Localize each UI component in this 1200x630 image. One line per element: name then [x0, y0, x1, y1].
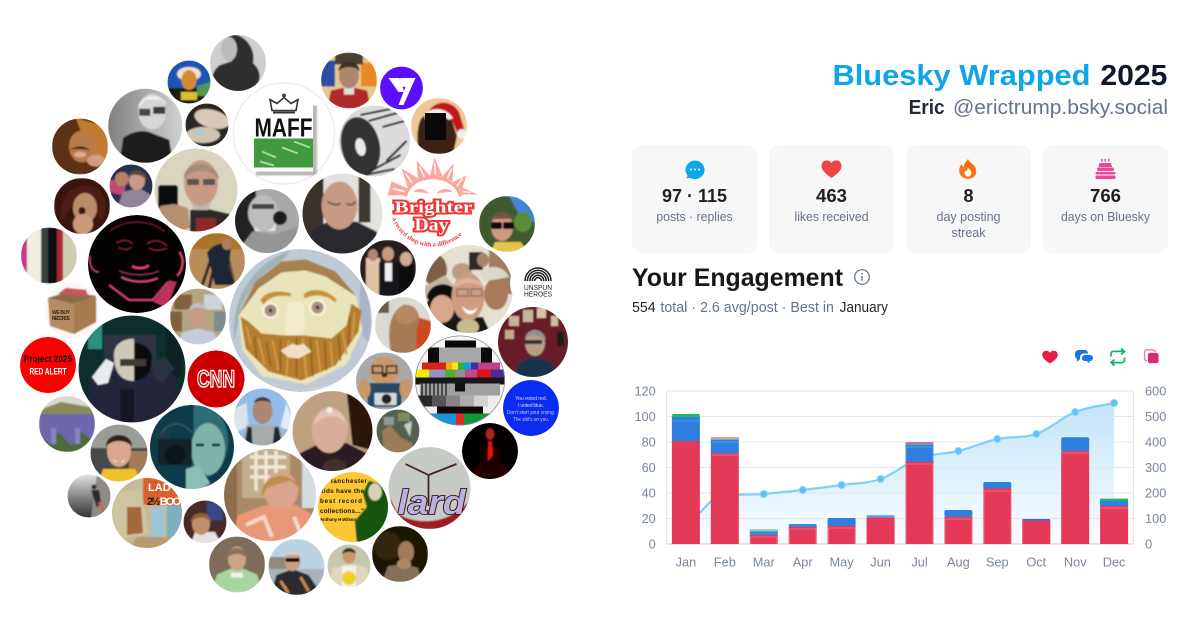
left axis labels: 40	[642, 486, 656, 500]
bar highlights	[712, 453, 1128, 544]
engagement summary: 554	[632, 300, 656, 316]
avatar: MAFF logo	[232, 82, 336, 185]
month labels: Aug	[947, 554, 970, 570]
avatar: Brighter Day record shop logo	[388, 158, 478, 246]
avatar: deer and bird	[376, 409, 420, 453]
avatar: MAFF logo: MAFF	[254, 112, 312, 142]
right axis labels	[1145, 384, 1166, 552]
bar: Sep	[983, 482, 1011, 544]
avatar: record shop crate: WE BUY	[52, 310, 71, 316]
avatar: CNN logo	[188, 350, 244, 408]
avatar: Ladybird books	[109, 477, 183, 549]
avatar: man taking a selfie	[154, 148, 238, 232]
bar: Jun	[867, 515, 895, 544]
icon: info	[855, 270, 869, 284]
right axis labels: 100	[1145, 511, 1166, 526]
avatar: Brighter Day record shop logo: Brighter	[394, 198, 473, 216]
left axis labels	[634, 384, 656, 552]
avatar: man in a pub	[497, 306, 569, 378]
avatar: Daft Punk album cover	[78, 315, 186, 423]
right axis labels: 200	[1145, 486, 1166, 500]
icon: birthday cake	[1096, 159, 1116, 179]
avatar: man with moustache	[52, 118, 108, 174]
stat card: day posting streak: 8	[964, 185, 974, 206]
avatar: Lard album cover: lard	[398, 484, 467, 522]
avatar: two women hugging	[109, 164, 153, 208]
stat card: day posting streak: day posting	[936, 209, 1000, 224]
engagement summary	[632, 300, 889, 316]
avatar: curly dog	[375, 297, 431, 353]
stat card: likes received: likes received	[794, 209, 868, 224]
avatar: teddy bear with camera	[356, 352, 414, 410]
bar: Mar	[750, 529, 778, 544]
avatar: Project 2025 red alert: Project 2025	[24, 353, 72, 364]
avatar: man with smiley shirt	[327, 544, 371, 588]
bar: Jan	[672, 414, 700, 544]
avatar: blue circle with poem text: The shit's on you.	[513, 417, 549, 423]
avatar: bearded man monochrome	[234, 188, 300, 254]
month labels: May	[830, 554, 854, 570]
avatar: Manchester record collections quote: Anthony H Wilson	[320, 517, 356, 522]
user name and handle: @erictrump.bsky.social	[953, 97, 1168, 119]
month labels: Apr	[793, 554, 813, 570]
chart grid	[666, 391, 1134, 544]
cumulative line	[686, 403, 1114, 518]
avatar: lupine field	[39, 396, 95, 452]
avatar: blue circle with poem text: I voted blue.	[518, 403, 544, 409]
stat card: day posting streak	[906, 145, 1031, 253]
avatar: Manchester record collections quote	[318, 472, 389, 542]
bar: Oct	[1022, 519, 1050, 544]
avatar: Lard album cover	[388, 447, 470, 529]
icon: legend reposts	[1111, 348, 1124, 366]
stacked bars	[672, 414, 1128, 544]
right axis labels: 500	[1145, 409, 1166, 424]
avatar: man in grey hoodie	[234, 388, 292, 446]
month labels: Jul	[911, 554, 928, 570]
stat card: likes received: 463	[816, 185, 847, 206]
left axis labels: 120	[634, 384, 656, 398]
avatar: grey man with glasses	[107, 88, 183, 164]
stat card: days on Bluesky	[1043, 145, 1168, 253]
avatar: teal portrait with camera	[149, 404, 235, 491]
avatar: young man in yellow shirt	[90, 424, 148, 482]
avatar: group selfie	[423, 244, 514, 335]
avatar: woman in dark with hand on mouth	[372, 526, 428, 582]
bar: Feb	[711, 437, 739, 544]
avatar: curly hair dark portrait	[54, 178, 110, 234]
right axis labels: 300	[1145, 460, 1166, 475]
avatar: cartoon Einstein	[167, 60, 211, 104]
avatar: bald man in black tee	[302, 172, 384, 254]
avatar: Manchester record collections quote: collections..."	[320, 508, 364, 515]
avatar: blue circle with poem text: Don't start your crying.	[507, 410, 555, 416]
avatar: purple V logo	[380, 66, 423, 110]
avatar: blue circle with poem text: You voted red.	[515, 396, 547, 402]
left axis labels: 20	[642, 511, 656, 526]
month labels: Sep	[986, 554, 1009, 570]
avatar: blue circle with poem text	[503, 380, 559, 436]
avatar: bald man smiling	[292, 390, 374, 475]
avatar: Brighter Day record shop logo: Day	[414, 214, 448, 234]
avatar: cyclist on road	[67, 474, 111, 518]
month labels: Jun	[870, 554, 891, 570]
icon: legend replies	[1075, 350, 1093, 364]
title: Bluesky Wrapped	[832, 60, 1090, 92]
avatar: Manchester record collections quote: ianchester	[331, 478, 368, 485]
bar: Aug	[944, 510, 972, 544]
left axis labels: 0	[649, 536, 656, 552]
bar: Apr	[789, 524, 817, 544]
avatar: worn shoes	[186, 104, 228, 146]
bar: Nov	[1061, 437, 1089, 544]
engagement summary: total · 2.6 avg/post · Best in	[660, 300, 834, 316]
avatar: TV test card	[415, 336, 505, 426]
avatar: santa hat with black square	[411, 98, 467, 154]
stat card: day posting streak: streak	[952, 225, 986, 240]
right axis labels: 600	[1145, 384, 1166, 398]
stat card: days on Bluesky: 766	[1090, 185, 1121, 206]
avatar: three people in formal dress	[360, 240, 416, 296]
avatar: woman with short hair	[183, 500, 227, 544]
bar: Jul	[906, 442, 934, 544]
bar: Dec	[1100, 498, 1128, 544]
stat card: posts and replies: posts · replies	[656, 209, 733, 224]
month labels	[676, 554, 1126, 570]
right axis labels: 400	[1145, 434, 1166, 450]
avatar: CNN logo: CNN	[197, 366, 235, 393]
month labels: Jan	[676, 554, 696, 570]
avatar: Ladybird books: LADY	[148, 482, 179, 494]
avatar: woman in green top	[209, 536, 265, 592]
avatar: book spines	[21, 228, 77, 284]
engagement chart	[634, 384, 1166, 570]
avatar: Brighter Day record shop logo: a record shop with a difference	[392, 218, 462, 246]
icon: flame	[959, 159, 976, 179]
engagement summary: January	[840, 300, 889, 316]
month labels: Oct	[1026, 554, 1047, 570]
avatar: man in red vest	[321, 52, 377, 108]
avatar bubble cluster	[20, 35, 568, 595]
avatar: record shop crate	[46, 286, 98, 336]
avatar: man with patterned shirt by a river	[268, 539, 324, 595]
avatar: woman in coral blouse	[223, 448, 317, 542]
user name and handle: Eric	[909, 97, 945, 119]
avatar: Project 2025 red alert: RED ALERT	[30, 366, 67, 376]
avatar: Unspun Heroes logo: HEROES	[524, 290, 552, 298]
month labels: Dec	[1103, 554, 1126, 570]
month labels: Mar	[753, 554, 776, 570]
avatar: woman in sunglasses	[479, 196, 535, 252]
icon: speech bubble	[686, 160, 705, 179]
stat card: likes received	[769, 145, 894, 253]
left axis labels: 60	[642, 460, 656, 475]
title: 2025	[1100, 60, 1167, 92]
avatar: Unspun Heroes logo: UNSPUN	[524, 283, 552, 292]
bar: May	[828, 518, 856, 544]
right axis labels: 0	[1145, 536, 1152, 552]
heading: your engagement: Your Engagement	[632, 264, 844, 292]
avatar: face made of food on a plate	[229, 249, 372, 392]
left axis labels: 80	[642, 434, 656, 450]
avatar: red lit figure	[462, 423, 518, 479]
avatar: Manchester record collections quote: best record	[320, 498, 362, 505]
avatar: dark red outline face	[88, 215, 186, 313]
avatar: record shop crate: RECORDS	[52, 316, 71, 322]
left axis labels: 100	[634, 409, 656, 424]
avatar: Manchester record collections quote: kids have the	[320, 488, 364, 495]
month labels: Feb	[714, 554, 736, 570]
avatar: hands holding record drawing	[336, 106, 410, 178]
icon: legend quotes	[1144, 350, 1159, 364]
month labels: Nov	[1064, 554, 1087, 570]
stat card: days on Bluesky: days on Bluesky	[1061, 209, 1151, 224]
avatar: Project 2025 red alert	[20, 337, 76, 393]
avatar: Ladybird books: 2½ BOO	[147, 496, 181, 508]
stat card: posts and replies	[632, 145, 757, 253]
avatar: black and white long hair	[210, 35, 266, 91]
chart legend	[1042, 348, 1159, 366]
cumulative area	[686, 403, 1114, 544]
line points	[760, 400, 1118, 498]
stat card: posts and replies: 97 · 115	[662, 185, 727, 206]
icon: legend heart	[1042, 351, 1058, 364]
avatar: Unspun Heroes logo	[510, 255, 566, 311]
avatar: man in front of bookshelf	[170, 288, 226, 344]
avatar: bowling alley	[189, 233, 245, 289]
icon: heart	[822, 160, 842, 178]
